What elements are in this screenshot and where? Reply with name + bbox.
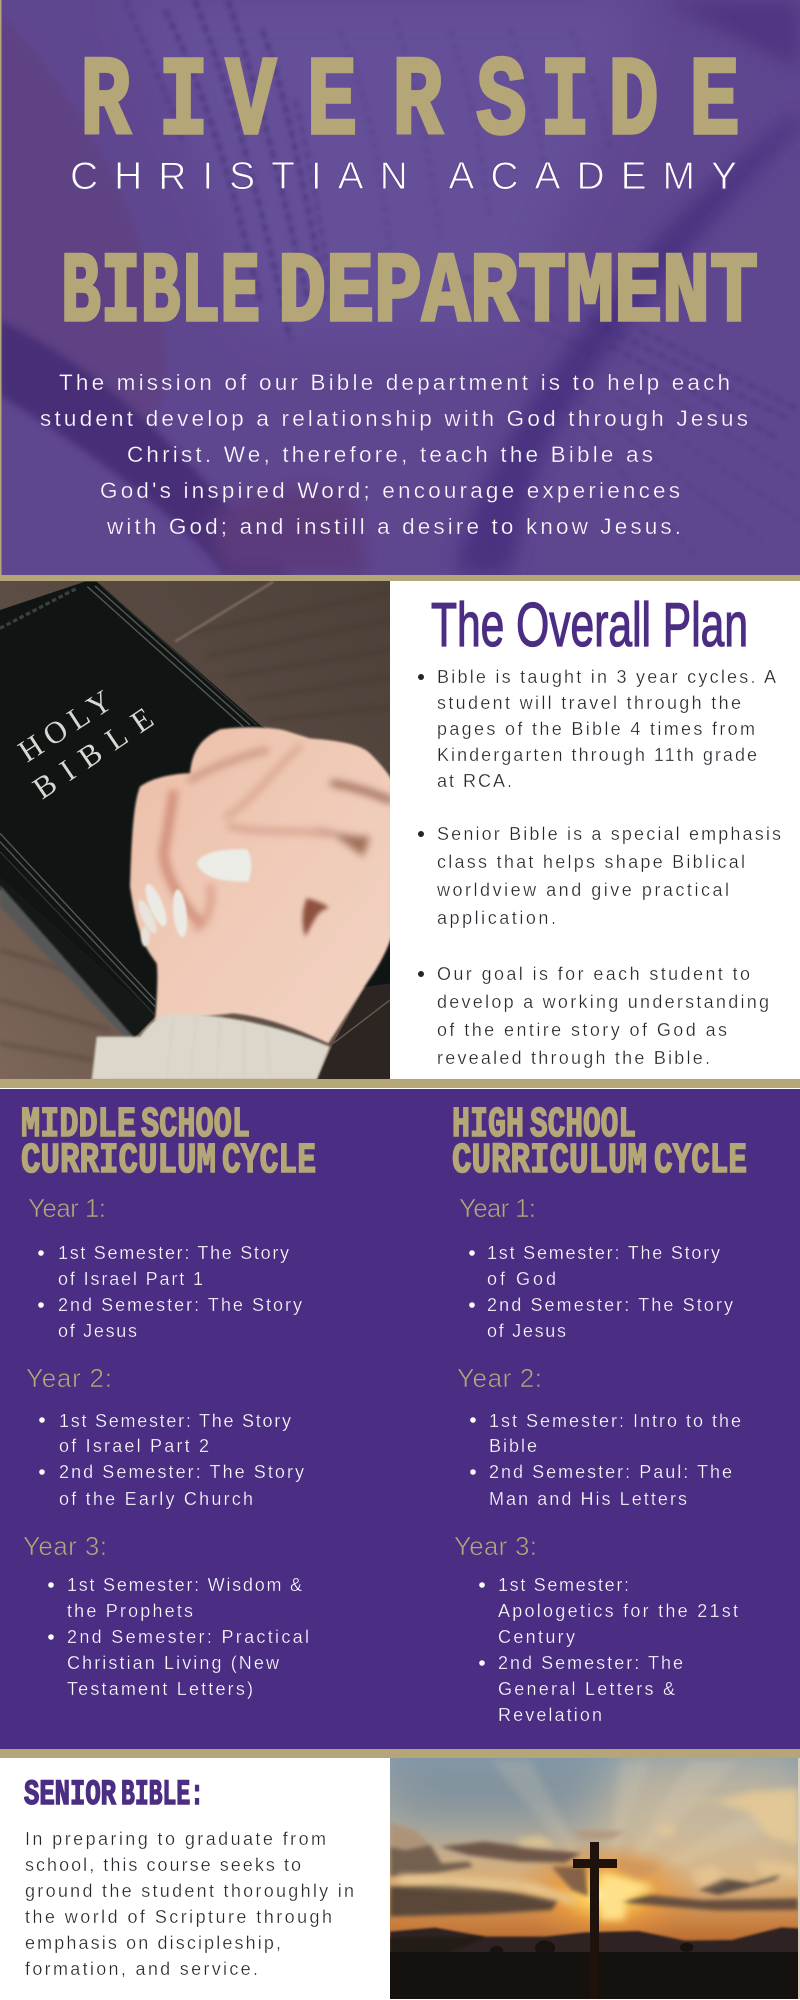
heading: high school curriculum cycle <box>452 1100 747 1185</box>
text block: senior bible description: ground the student thoroughly in <box>25 1881 354 1901</box>
cross <box>573 1842 617 1999</box>
heading: senior bible: BIBLE: <box>121 1775 204 1815</box>
year 2 list <box>470 1411 741 1509</box>
text block: mission statement: with God; and instill a desire to know Jesus. <box>106 514 681 539</box>
heading: senior bible: SENIOR <box>24 1775 116 1815</box>
subtitle: Christian Academy: CHRISTIAN ACADEMY <box>70 155 737 198</box>
text block: senior bible description: the world of Scripture through <box>25 1907 332 1927</box>
column: high school <box>452 1100 747 1725</box>
bullet list: plan points: revealed through the Bible. <box>437 1048 710 1068</box>
text block: senior bible description: emphasis on discipleship, <box>25 1933 281 1953</box>
clouds: dark <box>390 1823 798 1917</box>
bullet list: plan points: worldview and give practical <box>436 880 729 900</box>
year 3 list: 2nd Semester: Practical <box>67 1627 309 1647</box>
year 3 list: 2nd Semester: The <box>498 1653 683 1673</box>
heading: high school curriculum cycle: SCHOOL <box>530 1100 636 1149</box>
year 2 label: Year 2: <box>26 1363 112 1393</box>
text block: mission statement: God's inspired Word; encourage experiences <box>100 478 680 503</box>
divider band <box>0 1079 800 1088</box>
text block: mission statement: The mission of our Bible department is to help each <box>59 370 730 395</box>
heading: middle school curriculum cycle <box>21 1100 316 1185</box>
year 3 list <box>48 1575 309 1699</box>
bullet list: plan points: develop a working understanding <box>437 992 769 1012</box>
bullet list: plan points: Bible is taught in 3 year cycles. A <box>437 667 776 687</box>
sleeve <box>92 1014 330 1080</box>
year 3 label: Year 3: <box>23 1531 107 1561</box>
year 1 list <box>469 1243 733 1341</box>
book spine <box>0 878 155 1041</box>
year 1 list: of Israel Part 1 <box>58 1269 203 1289</box>
bullet list: plan points: student will travel through the <box>437 693 741 713</box>
heading: high school curriculum cycle: HIGH <box>452 1100 524 1149</box>
divider band <box>0 1749 800 1758</box>
year 3 list: Century <box>498 1627 575 1647</box>
hands base <box>130 727 392 1043</box>
heading: Bible Department: BIBLE <box>61 238 260 350</box>
year 2 list: 1st Semester: Intro to the <box>489 1411 741 1431</box>
heading: middle school curriculum cycle: SCHOOL <box>141 1100 250 1149</box>
hills <box>390 1926 798 1952</box>
text on the book cover: BIBLE <box>26 700 159 806</box>
title: Riverside: RIVERSIDE <box>80 40 740 167</box>
bullet list: plan points: Our goal is for each student to <box>437 964 750 984</box>
year 2 list: 1st Semester: The Story <box>59 1411 291 1431</box>
text block: mission statement: student develop a relationship with God through Jesus <box>40 406 748 431</box>
text on the book cover: HOLY <box>12 683 118 769</box>
photo: cross at sunset <box>390 1758 800 1999</box>
divider band <box>0 575 800 581</box>
bullet list: plan points: at RCA. <box>437 771 512 791</box>
panel: header with bible photo background <box>0 0 800 575</box>
heading: high school curriculum cycle: CYCLE <box>654 1136 747 1185</box>
cover border lines <box>0 586 257 1015</box>
year 3 list: General Letters & <box>498 1679 675 1699</box>
heading: middle school curriculum cycle: CYCLE <box>222 1136 316 1185</box>
year 1 list: of God <box>487 1269 556 1289</box>
year 2 list: Man and His Letters <box>489 1489 687 1509</box>
text block: senior bible description: formation, and service. <box>25 1959 258 1979</box>
year 2 list: 2nd Semester: Paul: The <box>489 1462 732 1482</box>
year 3 list: Testament Letters) <box>67 1679 253 1699</box>
panel: senior bible <box>0 1758 390 2000</box>
book page edge on the left <box>2 20 165 420</box>
year 2 list: 2nd Semester: The Story <box>59 1462 304 1482</box>
year 1 label: Year 1: <box>28 1193 106 1223</box>
year 3 list: 1st Semester: Wisdom & <box>67 1575 302 1595</box>
text block: senior bible description <box>25 1829 354 1979</box>
bullet list: plan points: Senior Bible is a special emphasis <box>437 824 781 844</box>
ground <box>390 1952 798 1999</box>
bullet list: plan points: of the entire story of God as <box>437 1020 727 1040</box>
sky tint <box>610 1758 798 1890</box>
text block: senior bible description: In preparing to graduate from <box>25 1829 326 1849</box>
year 3 list: 1st Semester: <box>498 1575 629 1595</box>
text block: mission statement: Christ. We, therefore, teach the Bible as <box>127 442 653 467</box>
heading: middle school curriculum cycle: MIDDLE <box>21 1100 136 1149</box>
heading: middle school curriculum cycle: CURRICULUM <box>21 1136 216 1185</box>
column: middle school <box>21 1100 316 1699</box>
wood grain <box>1 949 108 1062</box>
clouds: bright <box>398 1788 798 1903</box>
text block: mission statement <box>40 370 748 539</box>
scripture lines on the page <box>125 0 330 340</box>
year 3 list: Revelation <box>498 1705 602 1725</box>
year 1 list: 2nd Semester: The Story <box>487 1295 733 1315</box>
photo: hands praying on a holy bible <box>0 581 392 1080</box>
year 2 list: of Israel Part 2 <box>59 1436 209 1456</box>
bullet list: plan points: class that helps shape Biblical <box>437 852 745 872</box>
year 1 list: of Jesus <box>487 1321 566 1341</box>
dark table lower right <box>317 983 390 1080</box>
year 2 label: Year 2: <box>457 1363 542 1393</box>
year 2 list: of the Early Church <box>59 1489 253 1509</box>
heading: high school curriculum cycle: CURRICULUM <box>452 1136 647 1185</box>
year 3 label: Year 3: <box>454 1531 537 1561</box>
bullet list: plan points: application. <box>437 908 556 928</box>
text block: senior bible description: school, this course seeks to <box>25 1855 301 1875</box>
finger shading <box>163 747 390 928</box>
bullet list: plan points: pages of the Bible 4 times from <box>437 719 755 739</box>
dark top right corner <box>682 0 800 65</box>
dark ribbon <box>2 322 240 575</box>
year 3 list <box>479 1575 738 1725</box>
year 3 list: Apologetics for the 21st <box>498 1601 738 1621</box>
bullet list: plan points <box>418 667 781 1068</box>
sun rays <box>495 1760 730 1842</box>
bullet list: plan points: Kindergarten through 11th grade <box>437 745 757 765</box>
nails <box>197 849 251 882</box>
panel: the overall plan <box>390 581 800 1079</box>
heading: Bible Department <box>61 238 758 350</box>
year 3 list: Christian Living (New <box>67 1653 280 1673</box>
light page in the centre <box>182 28 598 302</box>
lower page tint <box>205 486 370 575</box>
year 3 list: the Prophets <box>67 1601 193 1621</box>
year 1 label: Year 1: <box>459 1193 536 1223</box>
year 1 list: 1st Semester: The Story <box>58 1243 289 1263</box>
sun glow <box>525 1846 692 1932</box>
year 2 list <box>39 1411 304 1509</box>
dark diagonal page shadow <box>455 110 800 575</box>
panel: curriculum cycles <box>0 1089 800 1749</box>
year 1 list <box>38 1243 302 1341</box>
year 1 list: of Jesus <box>58 1321 137 1341</box>
year 1 list: 1st Semester: The Story <box>487 1243 720 1263</box>
book cover <box>0 582 390 1017</box>
year 2 list: Bible <box>489 1436 537 1456</box>
year 1 list: 2nd Semester: The Story <box>58 1295 302 1315</box>
